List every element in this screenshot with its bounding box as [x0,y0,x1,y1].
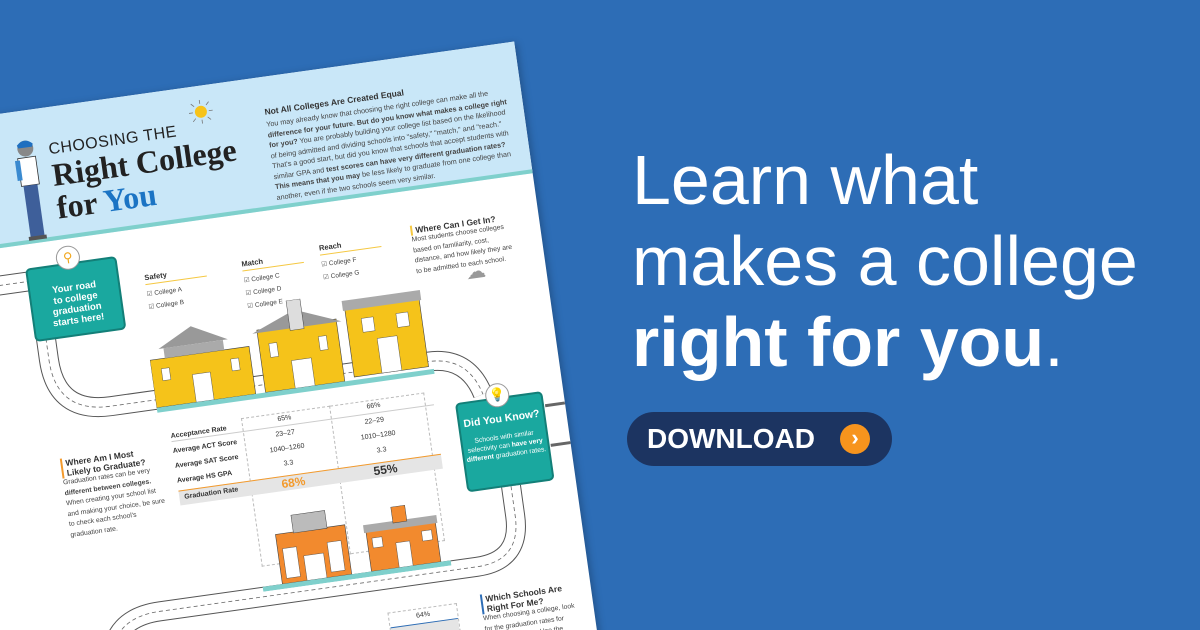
comparison table: Graduation Rate [184,486,239,501]
title: CHOOSING THE [48,123,178,158]
column: reach: College G [330,269,360,280]
text: which schools [480,583,575,630]
comparison table: 1010–1280 [360,430,396,442]
title: Right College [50,131,239,193]
yellow college buildings [150,290,434,413]
comparison table: 3.3 [376,446,387,455]
sign: your road: to college [53,290,98,307]
headline: makes a college [632,222,1138,300]
icon: clouds: ☁ [464,260,487,284]
bottom table partial [387,603,465,630]
comparison table: 55% [373,461,398,478]
comparison table: Acceptance Rate [170,425,227,440]
comparison table: Average ACT Score [172,439,238,455]
headline [632,141,1138,381]
intro text block: You may already know that choosing the right college can make all the difference for your future. But do you know what makes a college right for you? You are probably building your college list based on the likelihood of being admitted and dividing schools into "safety," "match," and "reach." That's a good start, but did you know that schools that accept students with similar GPA and test scores can have very different graduation rates? This means that you may be less likely to graduate from one college than another, even if the two schools seem very similar. [266,89,511,202]
title: for You [54,176,159,226]
text: which schools: Which Schools Are Right For Me? [485,583,563,614]
column: match: Match [241,257,264,269]
icon: orange chevron circle: › [851,425,859,450]
column: safety: College B [156,299,185,310]
text: where can I get in: Where Can I Get In? [415,214,496,235]
sign: your road: Your road [51,279,97,296]
comparison table: Average HS GPA [177,470,233,485]
icon: light bulb [484,382,511,409]
comparison table: 22–29 [364,416,384,426]
callout: did you know: Schools with similar selectivity can have very different graduation rates. [466,430,547,464]
column: safety: College A [154,286,182,297]
comparison table: Average SAT Score [174,454,239,470]
text: where am I most likely to graduate: Graduation rates can be very different between colleges. When creating your school list and making your choice, be sure to check each school's graduation rate. [63,467,165,539]
callout: did you know: Did You Know? [463,408,540,430]
column: match: College E [255,298,283,309]
title [48,123,239,226]
icon: orange chevron circle [840,424,870,454]
icon: sun [189,100,213,124]
comparison table: 3.3 [283,459,294,468]
intro text block: Not All Colleges Are Created Equal [264,87,404,117]
column: match [241,257,304,309]
header band [0,41,533,257]
icon: light bulb: 💡 [488,386,506,403]
comparison table: 66% [366,402,381,411]
column: match: College D [253,285,282,296]
comparison table: 65% [277,414,292,423]
text: where can I get in: Most students choose colleges based on familiarity, cost, distance, and how likely they are to be admitted to each school. [411,224,513,275]
comparison table: 23–27 [275,429,295,438]
bottom table partial: 64% [416,611,431,620]
sign: your road: graduation [52,301,102,318]
column: safety [144,270,207,310]
column: reach: Reach [318,241,342,253]
orange college buildings [262,505,452,592]
text: where am I most likely to graduate: Where Am I Most Likely to Graduate? [65,449,146,478]
sign: your road [25,256,126,342]
download button: DOWNLOAD [647,423,815,454]
column: safety: Safety [144,270,167,282]
headline: Learn what [632,141,978,219]
column: match: College C [251,272,280,283]
callout: did you know [455,391,555,492]
icon: student figure [15,140,47,241]
comparison table: 1040–1260 [269,443,305,454]
download button [627,412,892,466]
headline: right for you. [632,303,1064,381]
icon: map pin: ⚲ [62,249,74,265]
road [0,272,570,630]
icon: map pin [54,244,81,271]
column: reach [318,241,382,280]
sign: your road: starts here! [52,311,105,329]
comparison table: 68% [281,474,306,491]
infographic page (rotated) [0,41,628,630]
column: reach: College F [328,257,357,267]
comparison table [170,392,445,567]
